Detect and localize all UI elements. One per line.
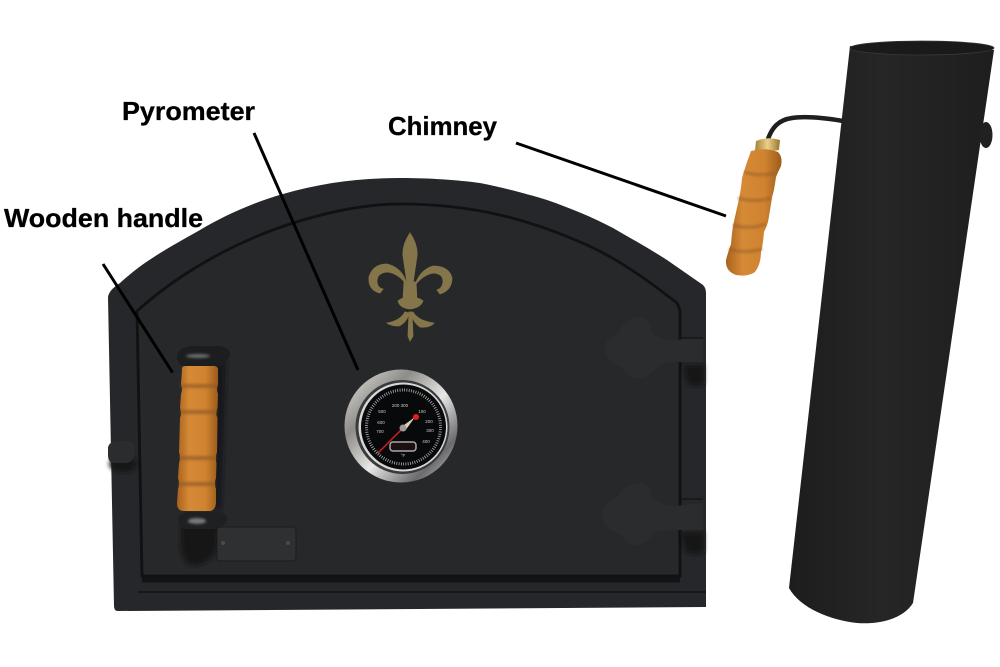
name plate xyxy=(217,527,296,561)
fleur-de-lis ornament xyxy=(369,233,452,341)
chimney pipe xyxy=(726,41,994,623)
dial numbers: 200 xyxy=(425,419,433,424)
side tab xyxy=(980,122,992,148)
pointer: Chimney xyxy=(516,143,726,216)
brass ferrule xyxy=(755,138,780,152)
bottom frame lines xyxy=(142,578,680,582)
label: Pyrometer: Pyrometer xyxy=(122,96,255,126)
grip ridges xyxy=(179,386,217,484)
label: Chimney: Chimney xyxy=(388,111,498,141)
dial numbers: 100 xyxy=(418,409,426,414)
wooden grip xyxy=(177,366,218,511)
pointer: Wooden handle xyxy=(103,264,172,372)
top cap xyxy=(177,346,230,367)
dial numbers: 300 xyxy=(426,428,434,433)
pointer: Pyrometer xyxy=(254,133,358,370)
door body xyxy=(108,178,706,611)
top hinge xyxy=(605,317,704,386)
dial numbers: 500 xyxy=(378,409,386,414)
pyrometer xyxy=(344,370,458,482)
dial numbers: 600 xyxy=(377,420,385,425)
dial numbers: 400 xyxy=(422,439,430,444)
bottom hinge xyxy=(602,483,704,554)
handle shadow xyxy=(181,525,219,565)
label: Wooden handle: Wooden handle xyxy=(4,203,203,233)
inner door panel xyxy=(137,204,680,576)
oven door xyxy=(108,178,706,611)
handle xyxy=(177,346,230,565)
pipe opening xyxy=(850,41,994,55)
dial numbers: °F xyxy=(401,453,406,458)
dial numbers xyxy=(376,403,434,458)
dial numbers: 200 300 xyxy=(392,403,409,408)
wooden chimney grip xyxy=(726,149,782,276)
bottom cap xyxy=(178,512,227,529)
pipe body xyxy=(789,46,994,623)
dial numbers: 700 xyxy=(376,429,384,434)
wire handle arm xyxy=(768,117,843,139)
left latch xyxy=(108,441,137,472)
